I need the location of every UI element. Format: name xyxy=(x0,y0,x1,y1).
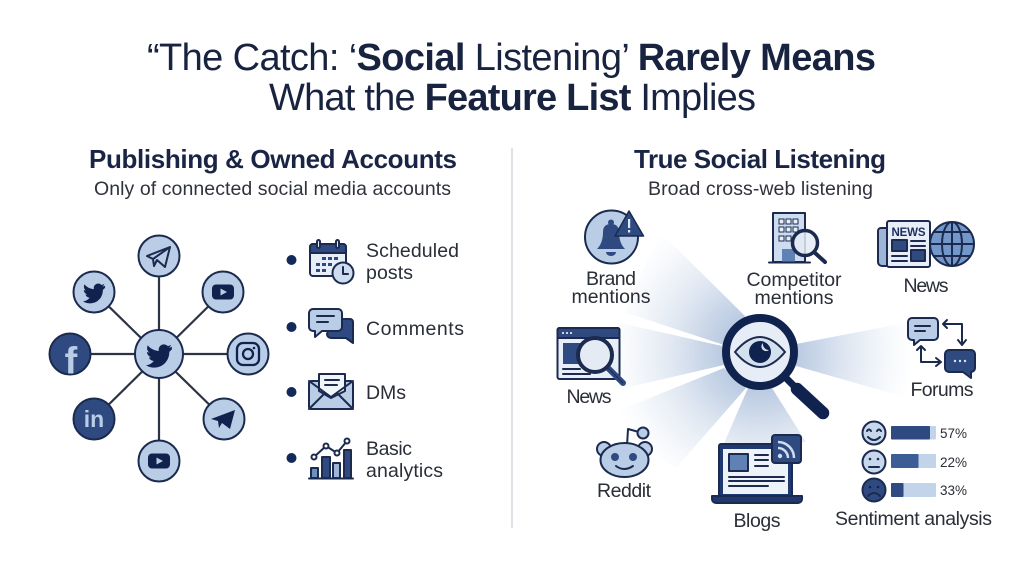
item: comments xyxy=(286,309,464,343)
source: news and globe xyxy=(878,221,974,297)
subheading: publishing: Only of connected social media accounts xyxy=(94,178,451,200)
icon: telegram solid xyxy=(204,398,244,440)
icon: youtube bottom xyxy=(138,440,180,482)
source: reddit: Reddit xyxy=(597,480,652,502)
source: competitor mentions: Competitor xyxy=(746,269,842,291)
source: news and globe: News xyxy=(904,275,949,297)
source: reddit xyxy=(597,428,652,502)
hub and spoke network of social accounts xyxy=(50,236,268,482)
icon: facebook: f xyxy=(65,340,78,382)
subheading: true social listening: Broad cross-web listening xyxy=(648,178,873,200)
icon: linkedin: in xyxy=(84,406,104,432)
source: blogs: Blogs xyxy=(734,510,781,532)
item: basic analytics: analytics xyxy=(366,460,443,482)
title: “The Catch: ‘Social Listening’ Rarely Means xyxy=(147,37,876,79)
source: brand mentions: Brand xyxy=(586,268,636,290)
sentiment row: positive xyxy=(862,422,967,444)
source: blogs xyxy=(712,435,802,532)
title xyxy=(147,37,876,119)
light rays from magnifier xyxy=(600,232,915,468)
source: brand mentions xyxy=(572,210,651,308)
item: scheduled posts: Scheduled xyxy=(366,240,459,262)
icon: linkedin xyxy=(74,398,114,440)
source: news browser xyxy=(558,328,623,408)
sentiment row: negative xyxy=(862,478,967,502)
icon: youtube top right xyxy=(202,272,244,312)
sentiment row: negative: 33% xyxy=(940,483,967,498)
item: DMs: DMs xyxy=(366,382,406,404)
icon: telegram outline xyxy=(138,236,180,276)
heading: true social listening: True Social Listening xyxy=(634,144,886,174)
source: news browser: News xyxy=(566,386,612,408)
icon: facebook xyxy=(50,334,90,382)
item: basic analytics xyxy=(286,438,443,482)
icon: twitter hub xyxy=(135,330,183,378)
feature list xyxy=(286,240,464,482)
item: scheduled posts xyxy=(286,240,459,284)
sentiment row: neutral: 22% xyxy=(940,455,967,470)
title: What the Feature List Implies xyxy=(269,77,756,119)
icon: instagram xyxy=(228,334,268,374)
source: forums: Forums xyxy=(910,379,974,401)
sentiment row: positive: 57% xyxy=(940,426,967,441)
item: scheduled posts: posts xyxy=(366,262,413,284)
icon: twitter outer xyxy=(74,272,114,312)
icon: magnifier with eye xyxy=(726,318,823,413)
sentiment row: neutral xyxy=(862,450,967,474)
panel: true social listening xyxy=(558,144,992,532)
item: comments: Comments xyxy=(366,318,464,340)
source: competitor mentions xyxy=(746,213,842,309)
source: competitor mentions: mentions xyxy=(754,287,834,309)
chart: sentiment analysis xyxy=(835,422,992,530)
heading: publishing: Publishing & Owned Accounts xyxy=(89,144,457,174)
item: DMs xyxy=(286,374,406,409)
chart: sentiment analysis: Sentiment analysis xyxy=(835,508,992,530)
source: brand mentions: mentions xyxy=(572,286,651,308)
source: forums xyxy=(908,318,975,401)
item: basic analytics: Basic xyxy=(366,438,412,460)
panel: publishing and owned accounts xyxy=(50,144,464,482)
source: news and globe: NEWS xyxy=(892,227,926,239)
